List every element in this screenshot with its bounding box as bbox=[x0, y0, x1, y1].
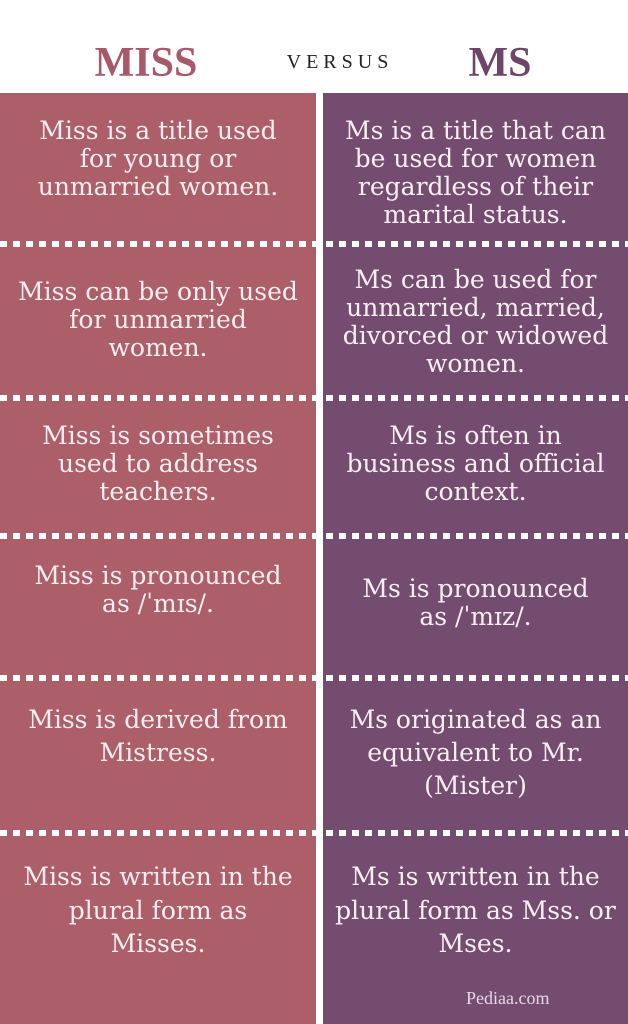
text: miss 2: Miss can be only used bbox=[18, 277, 298, 306]
text: ms 1: regardless of their bbox=[358, 172, 593, 201]
text: ms 6: plural form as Mss. or bbox=[335, 896, 616, 924]
text: ms 2: divorced or widowed bbox=[343, 321, 608, 350]
text: ms 3 bbox=[346, 421, 605, 506]
text: miss 4: as /ˈmɪs/. bbox=[102, 589, 214, 618]
text: miss 1: unmarried women. bbox=[38, 172, 278, 201]
text: miss 1 bbox=[38, 116, 278, 201]
text: miss 6: Miss is written in the bbox=[23, 862, 293, 891]
text: ms 1 bbox=[345, 116, 606, 229]
text: miss 4: Miss is pronounced bbox=[34, 561, 282, 590]
text: ms 3: context. bbox=[424, 477, 527, 506]
text: ms 3: Ms is often in bbox=[389, 421, 562, 450]
title: MS: MS bbox=[468, 40, 532, 86]
panel: Ms column bbox=[323, 93, 628, 1024]
panel: Miss column bbox=[0, 93, 316, 1024]
text: miss 6: plural form as bbox=[69, 896, 247, 924]
text: miss 4 bbox=[34, 561, 282, 618]
text: ms 3: business and official bbox=[346, 449, 605, 478]
text: miss 6: Misses. bbox=[111, 929, 205, 958]
text: ms 6 bbox=[335, 862, 616, 958]
title: VERSUS: VERSUS bbox=[287, 51, 393, 73]
text: miss 5: Miss is derived from bbox=[28, 705, 288, 734]
text: miss 2: women. bbox=[108, 333, 208, 362]
text: miss 6 bbox=[23, 862, 293, 958]
text: ms 4 bbox=[362, 574, 589, 631]
text: ms 4: Ms is pronounced bbox=[362, 574, 589, 603]
text: ms 2 bbox=[343, 265, 608, 378]
text: ms 4: as /ˈmɪz/. bbox=[419, 602, 532, 631]
text: miss 3: Miss is sometimes bbox=[42, 421, 274, 450]
text: ms 1: marital status. bbox=[383, 200, 568, 229]
text: miss 1: for young or bbox=[80, 144, 236, 173]
text: ms 2: unmarried, married, bbox=[346, 293, 605, 322]
text: ms 5 bbox=[350, 705, 601, 800]
text: ms 2: Ms can be used for bbox=[354, 265, 596, 294]
text: miss 5 bbox=[28, 705, 288, 767]
text: ms 1: Ms is a title that can bbox=[345, 116, 606, 145]
text: ms 5: equivalent to Mr. bbox=[367, 738, 584, 767]
text: ms 5: (Mister) bbox=[424, 771, 527, 800]
logo: Pediaa.com: Pediaa.com bbox=[466, 988, 549, 1008]
text: miss 5: Mistress. bbox=[100, 738, 216, 767]
text: miss 3: used to address bbox=[58, 449, 258, 478]
text: ms 5: Ms originated as an bbox=[350, 705, 601, 734]
text: ms 2: women. bbox=[426, 349, 525, 378]
text: ms 6: Ms is written in the bbox=[351, 862, 600, 891]
text: miss 3 bbox=[42, 421, 274, 506]
text: miss 2 bbox=[18, 277, 298, 362]
title: MISS: MISS bbox=[95, 40, 197, 86]
text: ms 1: be used for women bbox=[355, 144, 596, 173]
text: miss 3: teachers. bbox=[99, 477, 217, 506]
text: miss 1: Miss is a title used bbox=[39, 116, 277, 145]
text: ms 6: Mses. bbox=[438, 929, 512, 958]
text: miss 2: for unmarried bbox=[69, 305, 247, 334]
